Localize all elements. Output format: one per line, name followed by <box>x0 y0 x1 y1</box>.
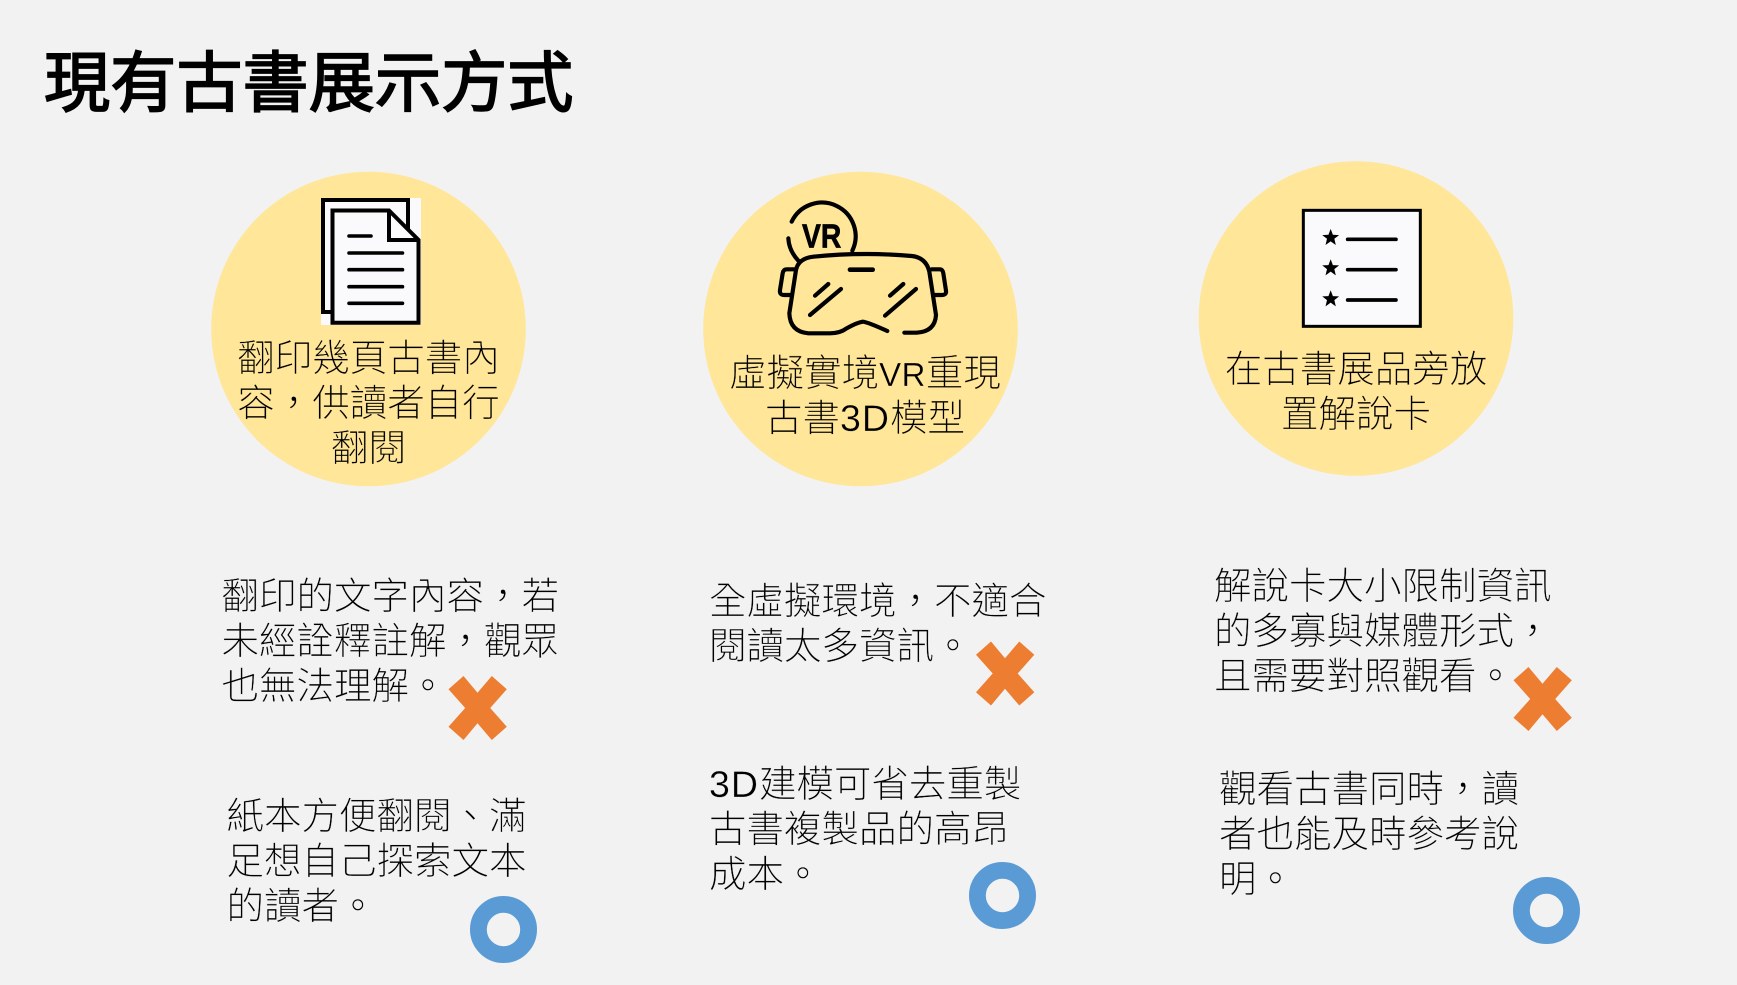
icon: VR headset: VR <box>802 218 841 255</box>
benefit text: photocopied pages <box>226 795 526 927</box>
icon: orange cross 2 <box>976 642 1034 706</box>
drawback text: photocopied pages <box>222 575 559 707</box>
drawback text: photocopied pages: 也無法理解。 <box>222 665 446 707</box>
icon: document pages <box>321 198 421 325</box>
circle caption: explanation card: 在古書展品旁放 <box>1225 348 1487 390</box>
icon: orange cross 3 <box>1514 667 1572 731</box>
circle caption: VR model <box>729 352 1001 439</box>
drawback text: VR model: 閱讀太多資訊。 <box>709 625 972 667</box>
icon: VR headset <box>780 203 946 333</box>
circle caption: VR model: 古書3D模型 <box>765 397 965 439</box>
drawback text: explanation card: 且需要對照觀看。 <box>1214 655 1514 697</box>
drawback text: explanation card: 解說卡大小限制資訊 <box>1214 565 1552 607</box>
benefit text: VR model: 成本。 <box>709 853 822 895</box>
benefit text: photocopied pages: 足想自己探索文本 <box>226 840 526 882</box>
drawback text: explanation card <box>1214 565 1552 697</box>
benefit text: explanation card: 者也能及時參考說 <box>1219 813 1519 855</box>
yellow circle: photocopied pages <box>211 172 526 486</box>
icon: blue circle 3 <box>1521 885 1572 936</box>
yellow circle: VR model <box>703 172 1018 486</box>
circle caption: photocopied pages: 翻閱 <box>331 427 406 469</box>
circle caption: explanation card: 置解說卡 <box>1281 393 1431 435</box>
icon: blue circle 2 <box>977 870 1028 921</box>
benefit text: VR model: 3D建模可省去重製 <box>709 763 1021 805</box>
benefit text: VR model <box>709 763 1021 895</box>
panel: VR model <box>703 172 1018 486</box>
yellow circle: explanation card <box>1199 161 1513 476</box>
icon: starred list card <box>1303 210 1420 326</box>
benefit text: explanation card: 明。 <box>1219 858 1294 900</box>
benefit text: explanation card <box>1219 768 1519 900</box>
circle caption: photocopied pages: 容，供讀者自行 <box>237 382 500 424</box>
circle caption: photocopied pages: 翻印幾頁古書內 <box>237 337 500 379</box>
panel: photocopied pages <box>211 172 526 486</box>
panel: explanation card <box>1199 161 1513 476</box>
circle caption: VR model: 虛擬實境VR重現 <box>729 352 1001 394</box>
drawback text: explanation card: 的多寡與媒體形式， <box>1214 610 1552 652</box>
benefit text: photocopied pages: 的讀者。 <box>226 885 376 927</box>
icon: blue circle 1 <box>478 904 529 955</box>
title: 現有古書展示方式 <box>44 47 574 121</box>
drawback text: VR model: 全虛擬環境，不適合 <box>709 580 1046 622</box>
icon: orange cross 1 <box>448 676 507 740</box>
benefit text: VR model: 古書複製品的高昂 <box>709 808 1009 850</box>
benefit text: photocopied pages: 紙本方便翻閱、滿 <box>226 795 526 837</box>
drawback text: VR model <box>709 580 1046 667</box>
benefit text: explanation card: 觀看古書同時，讀 <box>1219 768 1519 810</box>
drawback text: photocopied pages: 翻印的文字內容，若 <box>222 575 559 617</box>
circle caption: photocopied pages <box>237 337 500 469</box>
circle caption: explanation card <box>1225 348 1487 435</box>
drawback text: photocopied pages: 未經詮釋註解，觀眾 <box>222 620 559 662</box>
